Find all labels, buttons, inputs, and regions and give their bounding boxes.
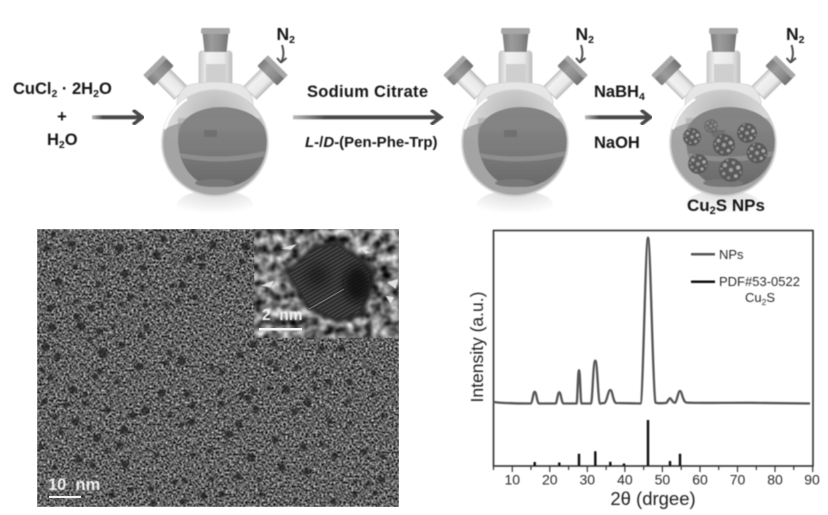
legend swatch: PDF bbox=[691, 280, 715, 283]
x axis title: 2θ (drgee) bbox=[610, 488, 696, 509]
legend label: Cu2S: S bbox=[766, 290, 775, 305]
N2 inlet 3: N bbox=[786, 24, 799, 44]
NPs diffraction curve bbox=[494, 238, 810, 404]
legend label: NPs: NPs bbox=[719, 247, 744, 262]
legend label: Cu2S: Cu bbox=[745, 290, 762, 305]
label: peptide: L-/D-(Pen-Phe-Trp) bbox=[305, 134, 438, 151]
reagent label: CuCl2 2H2O + H2O: + bbox=[57, 108, 67, 126]
N2 inlet 2: N bbox=[576, 24, 588, 44]
x tick labels: 10 bbox=[505, 472, 520, 488]
panel: TEM micrograph bbox=[37, 228, 399, 507]
nanoparticle cluster bbox=[683, 119, 768, 182]
panel: HRTEM inset bbox=[254, 229, 399, 338]
arrow 1 bbox=[92, 110, 142, 124]
N2 inlet 3 bbox=[786, 24, 805, 62]
legend bbox=[691, 247, 800, 307]
legend label: PDF#53-0522: PDF#53-0522 bbox=[719, 274, 800, 289]
label: Sodium Citrate: Sodium Citrate bbox=[307, 83, 428, 101]
label: Cu2S NPs: 2 bbox=[710, 205, 716, 217]
panel: XRD chart bbox=[467, 230, 820, 509]
label: Cu2S NPs: S NPs bbox=[716, 196, 765, 215]
x tick labels: 40 bbox=[617, 472, 633, 488]
x tick labels: 30 bbox=[580, 472, 595, 488]
reagent label: CuCl2 2H2O + H2O: CuCl bbox=[13, 80, 52, 98]
x tick labels: 80 bbox=[767, 472, 783, 488]
arrow 3 bbox=[585, 110, 650, 124]
reference stick pattern bbox=[535, 420, 680, 466]
x tick labels: 90 bbox=[804, 472, 820, 488]
label: NaBH4: 4 bbox=[639, 91, 645, 103]
N2 inlet 1 bbox=[276, 24, 295, 62]
scale label: 2 nm: 2 nm bbox=[262, 307, 302, 324]
reagent label: CuCl2 2H2O + H2O: H bbox=[47, 131, 59, 149]
legend swatch: NPs bbox=[691, 253, 715, 256]
x tick labels bbox=[505, 472, 820, 488]
flask 1 bbox=[143, 28, 288, 220]
x tick labels: 70 bbox=[730, 472, 745, 488]
y axis title: Intensity (a.u.) bbox=[467, 292, 487, 402]
label: NaBH4: NaBH bbox=[594, 83, 639, 101]
nanoparticle crystal bbox=[261, 241, 398, 324]
reagent label: CuCl2 2H2O + H2O: 2 bbox=[93, 88, 99, 100]
scale label: 10 nm: 10 nm bbox=[48, 476, 100, 494]
arrow 2 bbox=[293, 110, 441, 124]
N2 inlet 1: N bbox=[276, 24, 289, 44]
N2 inlet 2: 2 bbox=[588, 34, 594, 46]
reagent label: CuCl2 2H2O + H2O: O bbox=[65, 131, 78, 149]
N2 inlet 3: 2 bbox=[799, 34, 805, 46]
N2 inlet 1: 2 bbox=[289, 34, 295, 46]
reagent label: CuCl2 2H2O + H2O bbox=[13, 80, 112, 151]
scale bar: 2 nm bbox=[259, 328, 302, 330]
reagent label: CuCl2 2H2O + H2O: · 2H bbox=[57, 80, 93, 98]
reagent label: CuCl2 2H2O + H2O: 2 bbox=[52, 88, 58, 100]
x tick labels: 50 bbox=[655, 472, 670, 488]
nanoparticles in TEM bbox=[38, 228, 386, 506]
x tick labels: 60 bbox=[692, 472, 708, 488]
x ticks bbox=[494, 466, 813, 472]
N2 inlet 2 bbox=[576, 24, 594, 62]
label: Cu2S NPs: Cu bbox=[687, 196, 710, 215]
flask 2 bbox=[443, 28, 588, 220]
legend label: Cu2S: 2 bbox=[762, 297, 767, 307]
label: NaOH: NaOH bbox=[594, 134, 640, 152]
reagent label: CuCl2 2H2O + H2O: 2 bbox=[59, 139, 65, 151]
reagent label: CuCl2 2H2O + H2O: O bbox=[99, 80, 112, 98]
axes frame bbox=[494, 230, 813, 466]
scale bar: 10 nm bbox=[49, 496, 81, 498]
flask 3 with nanoparticles bbox=[651, 28, 796, 220]
x tick labels: 20 bbox=[542, 472, 558, 488]
